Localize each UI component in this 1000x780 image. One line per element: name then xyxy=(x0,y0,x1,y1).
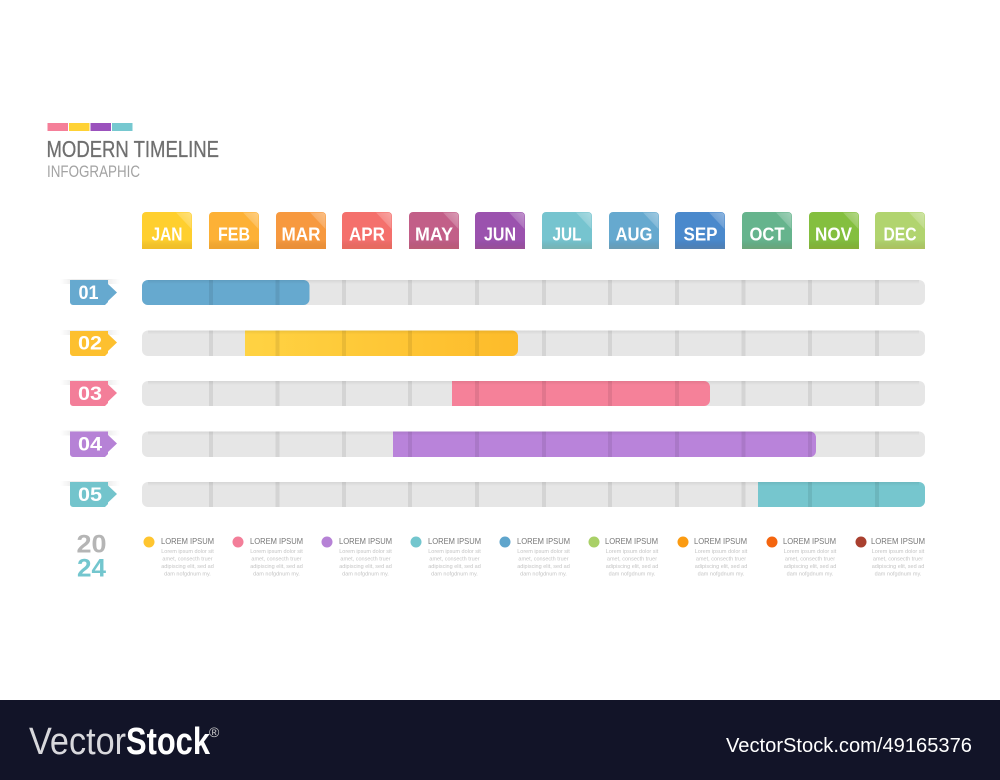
title: INFOGRAPHIC xyxy=(47,162,140,181)
legend item 4: dam nofgdnum my. xyxy=(431,572,478,578)
month: SEP xyxy=(675,212,725,249)
month: JUL xyxy=(542,212,592,249)
legend item 9: adipiscing elit, sed ad xyxy=(872,564,924,570)
legend item 8: LOREM IPSUM xyxy=(783,536,836,546)
legend item 6: adipiscing elit, sed ad xyxy=(606,564,658,570)
month: SEP: SEP xyxy=(684,224,718,244)
row tag 01 xyxy=(60,279,120,305)
legend item 9: dam nofgdnum my. xyxy=(875,572,922,578)
legend item 6: LOREM IPSUM xyxy=(605,536,658,546)
month: JAN: JAN xyxy=(152,224,182,244)
legend item 2: adipiscing elit, sed ad xyxy=(250,564,303,570)
legend item 5: Lorem ipsum dolor sit xyxy=(517,549,570,555)
month: MAY xyxy=(409,212,459,249)
VectorStock logo: ® xyxy=(209,724,220,740)
month: DEC: DEC xyxy=(884,224,916,244)
month: OCT xyxy=(742,212,792,249)
legend item 5: adipiscing elit, sed ad xyxy=(517,564,570,570)
track xyxy=(142,482,925,507)
legend item 3: LOREM IPSUM xyxy=(339,536,392,546)
span bar xyxy=(245,330,518,356)
track xyxy=(142,432,925,457)
row tag 04: 04 xyxy=(78,434,102,456)
month: DEC xyxy=(875,212,925,249)
legend item 3: adipiscing elit, sed ad xyxy=(339,564,392,570)
year 2024 xyxy=(76,530,106,582)
legend item 5: dam nofgdnum my. xyxy=(520,572,567,578)
VectorStock logo xyxy=(29,721,220,763)
month: JAN xyxy=(142,212,192,249)
span bar xyxy=(758,482,925,507)
legend item 9: amet, consecth truer xyxy=(873,556,923,562)
legend item 7: Lorem ipsum dolor sit xyxy=(695,549,748,555)
month: FEB: FEB xyxy=(218,224,250,244)
month: FEB xyxy=(209,212,259,249)
legend item 8: dam nofgdnum my. xyxy=(787,572,834,578)
month: JUN: JUN xyxy=(484,224,516,244)
row 01: blue bar xyxy=(60,279,925,305)
legend xyxy=(144,536,925,578)
legend item 6: dam nofgdnum my. xyxy=(609,572,656,578)
legend item 4 xyxy=(410,536,481,578)
track xyxy=(142,280,925,305)
legend item 4: adipiscing elit, sed ad xyxy=(428,564,481,570)
span bar xyxy=(393,432,816,457)
VectorStock logo: Stock xyxy=(126,721,211,763)
row tag 05 xyxy=(60,481,120,507)
year 2024: 24 xyxy=(77,554,106,582)
legend item 9: Lorem ipsum dolor sit xyxy=(872,549,925,555)
title: MODERN TIMELINE xyxy=(46,136,219,162)
legend item 7: adipiscing elit, sed ad xyxy=(695,564,747,570)
legend item 7 xyxy=(678,536,748,578)
legend item 1: Lorem ipsum dolor sit xyxy=(161,549,214,555)
year 2024: 20 xyxy=(76,530,106,558)
row tag 05: 05 xyxy=(78,485,102,506)
legend item 2: dam nofgdnum my. xyxy=(253,572,300,578)
legend item 4: LOREM IPSUM xyxy=(428,536,481,546)
VectorStock logo: Vector xyxy=(29,721,126,763)
row tag 02 xyxy=(60,330,120,356)
month: MAR xyxy=(276,212,326,249)
row 05: teal bar xyxy=(60,481,925,507)
month: AUG: AUG xyxy=(616,224,652,244)
title xyxy=(46,136,219,181)
legend item 8: adipiscing elit, sed ad xyxy=(784,564,836,570)
legend item 4: Lorem ipsum dolor sit xyxy=(428,549,481,555)
span bar xyxy=(142,280,310,305)
row 04: purple bar xyxy=(60,430,925,457)
legend item 9 xyxy=(856,536,925,578)
legend item 1: dam nofgdnum my. xyxy=(164,572,211,578)
legend item 2: LOREM IPSUM xyxy=(250,536,303,546)
legend item 7: dam nofgdnum my. xyxy=(698,572,745,578)
month: NOV: NOV xyxy=(815,224,852,244)
legend item 6: amet, consecth truer xyxy=(607,556,657,562)
month: JUL: JUL xyxy=(552,224,582,244)
legend item 3: Lorem ipsum dolor sit xyxy=(339,549,392,555)
month header tiles xyxy=(142,212,925,249)
legend item 1: adipiscing elit, sed ad xyxy=(161,564,214,570)
legend item 8 xyxy=(766,536,837,578)
legend item 3 xyxy=(322,536,392,578)
month: MAR: MAR xyxy=(282,224,320,244)
legend item 1 xyxy=(144,536,214,578)
legend item 5: amet, consecth truer xyxy=(518,556,569,562)
legend item 9: LOREM IPSUM xyxy=(871,536,925,546)
legend item 5: LOREM IPSUM xyxy=(517,536,570,546)
row tag 04 xyxy=(60,430,120,457)
legend item 3: dam nofgdnum my. xyxy=(342,572,389,578)
month: APR: APR xyxy=(349,224,385,244)
month: MAY: MAY xyxy=(415,224,453,244)
legend item 5 xyxy=(500,536,570,578)
row tag 02: 02 xyxy=(78,334,102,354)
month: APR xyxy=(342,212,392,249)
row tag 03 xyxy=(60,380,120,406)
legend item 2: amet, consecth truer xyxy=(251,556,302,562)
watermark footer xyxy=(0,700,1000,780)
row tag 01: 01 xyxy=(78,283,99,304)
row tag 03: 03 xyxy=(78,384,102,405)
month: OCT: OCT xyxy=(750,224,784,244)
row 02: yellow bar xyxy=(60,330,925,356)
legend item 7: LOREM IPSUM xyxy=(694,536,747,546)
legend item 1: amet, consecth truer xyxy=(162,556,213,562)
legend item 8: amet, consecth truer xyxy=(785,556,835,562)
legend item 2: Lorem ipsum dolor sit xyxy=(250,549,303,555)
span bar xyxy=(452,381,710,406)
month: AUG xyxy=(609,212,659,249)
row 03: pink bar xyxy=(60,380,925,406)
image id: VectorStock.com/49165376 xyxy=(726,735,972,757)
legend item 4: amet, consecth truer xyxy=(429,556,480,562)
legend item 7: amet, consecth truer xyxy=(696,556,746,562)
legend item 1: LOREM IPSUM xyxy=(161,536,214,546)
colour swatch strip xyxy=(48,123,132,131)
track xyxy=(142,330,925,356)
legend item 6: Lorem ipsum dolor sit xyxy=(606,549,659,555)
month: JUN xyxy=(475,212,525,249)
legend item 8: Lorem ipsum dolor sit xyxy=(784,549,837,555)
legend item 3: amet, consecth truer xyxy=(340,556,391,562)
legend item 6 xyxy=(588,536,659,578)
track xyxy=(142,381,925,406)
legend item 2 xyxy=(232,536,303,578)
month: NOV xyxy=(809,212,859,249)
